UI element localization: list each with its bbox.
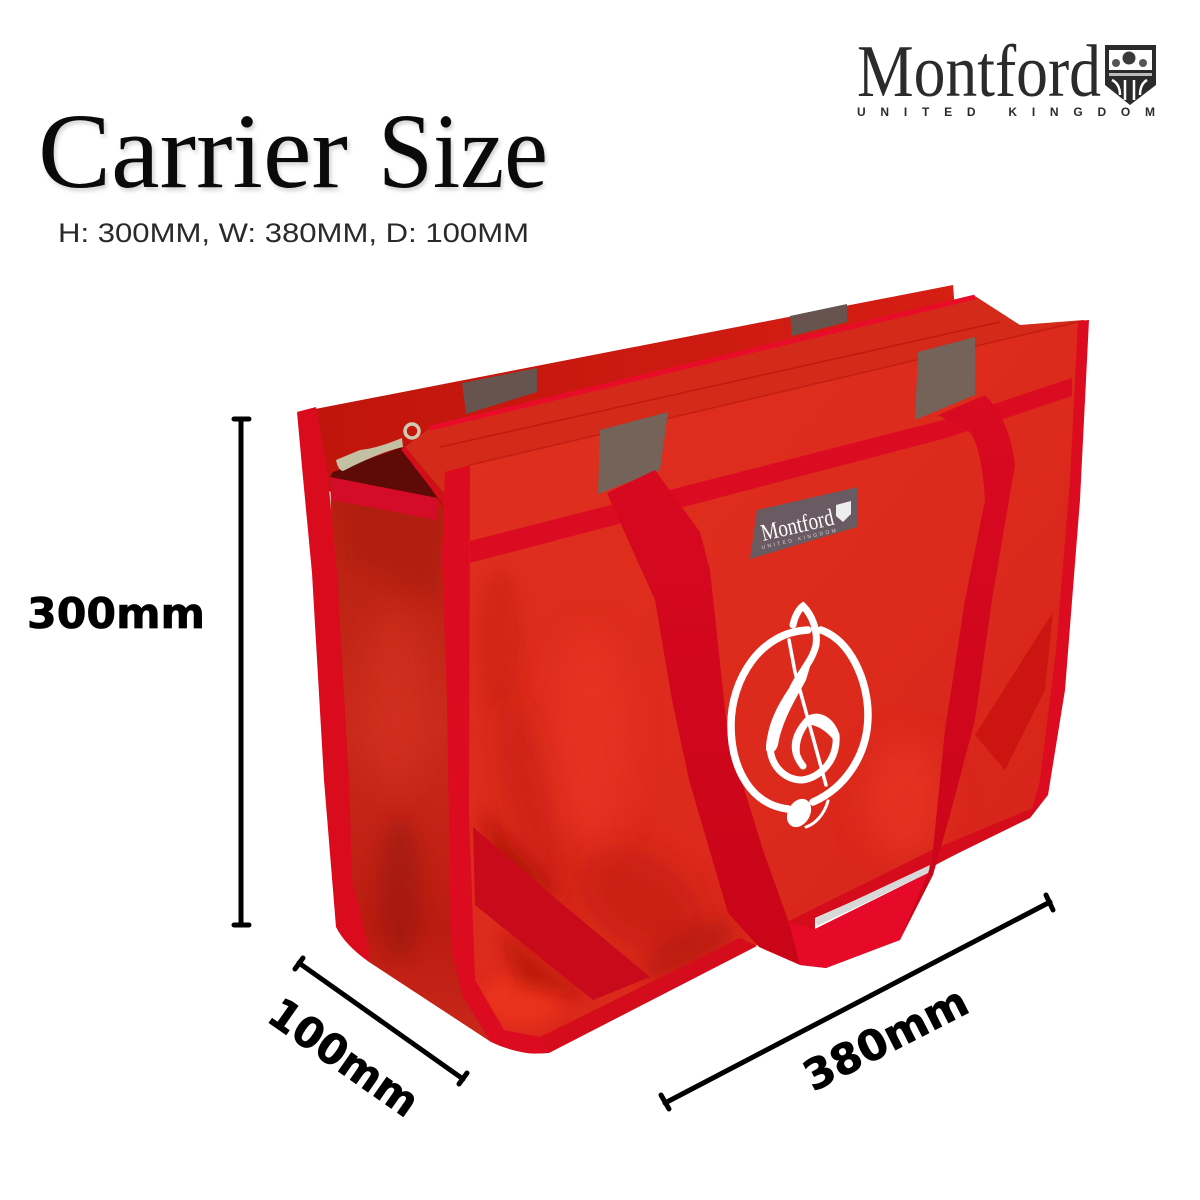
bottom-left corner strap xyxy=(473,827,650,1000)
patch tagline: UNITED KINGDOM xyxy=(761,528,837,551)
dark interior xyxy=(330,447,446,510)
logo tagline: UNITED KINGDOM xyxy=(857,105,1155,119)
bottom binding left xyxy=(540,938,757,1053)
treble clef logo xyxy=(731,606,868,831)
side pocket binding xyxy=(330,477,437,520)
zipper pull xyxy=(336,424,419,471)
brand patch xyxy=(750,487,858,559)
carrier bag xyxy=(297,285,1089,1054)
back brown tab right xyxy=(790,304,847,336)
logo shield xyxy=(1105,45,1156,105)
clef ring xyxy=(731,630,868,809)
front brown tab left xyxy=(598,412,668,494)
logo: Montford United Kingdom xyxy=(857,31,1156,119)
clef note xyxy=(782,795,828,831)
front brown tab right xyxy=(915,337,975,420)
compartment flap edge xyxy=(403,448,447,505)
zipper compartment xyxy=(405,296,1084,530)
title xyxy=(38,93,548,211)
left side panel xyxy=(330,478,491,1042)
side panel folds xyxy=(354,506,439,960)
zipper stitching xyxy=(440,322,1000,447)
back brown tab left xyxy=(462,368,537,414)
title word one: Carrier xyxy=(38,93,348,211)
front left binding xyxy=(442,465,549,1054)
height measure line xyxy=(234,419,249,925)
right corner strap xyxy=(975,612,1053,770)
white board edge xyxy=(815,865,930,926)
logo wordmark: Montford xyxy=(857,31,1101,113)
front pocket binding xyxy=(470,378,1072,563)
front right binding xyxy=(1030,320,1089,818)
zipper tape xyxy=(430,297,975,428)
subtitle: dimensions: H: 300MM, W: 380MM, D: 100MM xyxy=(58,218,529,248)
clef body xyxy=(766,606,839,785)
depth measure line xyxy=(295,958,467,1084)
width label: 380mm xyxy=(795,976,976,1101)
height label: 300mm xyxy=(27,589,205,638)
handle lower loop xyxy=(789,873,928,968)
title word two: Size xyxy=(378,93,548,211)
front top edge shade xyxy=(470,322,1078,465)
front panel folds xyxy=(478,570,945,1025)
width measure line xyxy=(661,895,1053,1109)
front panel xyxy=(448,320,1084,1054)
bottom binding right xyxy=(789,805,1040,930)
patch wordmark: Montford xyxy=(759,505,836,547)
back panel xyxy=(310,285,1020,520)
depth label: 100mm xyxy=(259,988,428,1127)
left binding xyxy=(297,407,369,962)
patch shield xyxy=(836,501,851,522)
carrying handle xyxy=(607,395,1015,968)
